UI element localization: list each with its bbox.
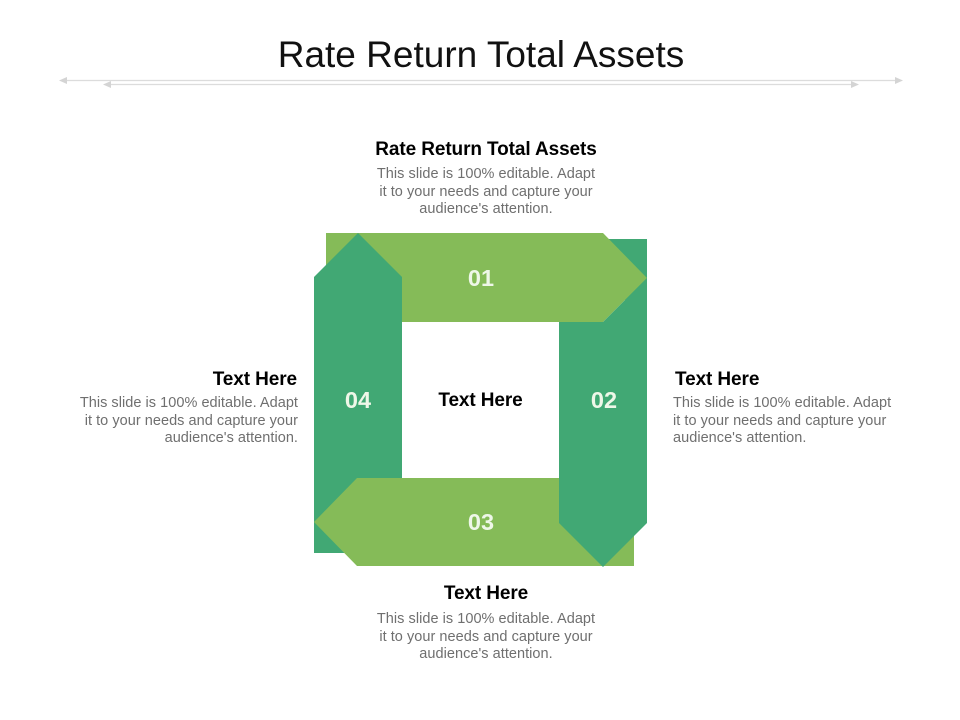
- top text: it to your needs and capture your: [379, 184, 593, 200]
- left text: audience's attention.: [165, 430, 298, 446]
- bottom heading: Text Here: [444, 583, 528, 604]
- right text: it to your needs and capture your: [673, 413, 886, 429]
- arrow 03: [314, 478, 634, 566]
- decorative double-headed title rule: [59, 77, 903, 88]
- title: Rate Return Total Assets: [278, 34, 684, 75]
- bottom text: [377, 611, 595, 662]
- bottom text: This slide is 100% editable. Adapt: [377, 611, 595, 627]
- right heading: Text Here: [675, 369, 759, 390]
- top text: [377, 166, 595, 217]
- arrow 01: [326, 233, 647, 322]
- arrow 02 body: [559, 278, 647, 567]
- arrow 04: [314, 233, 402, 553]
- top text: audience's attention.: [419, 201, 553, 217]
- top heading: Rate Return Total Assets: [375, 139, 597, 160]
- number 02: 02: [591, 387, 617, 413]
- left text: it to your needs and capture your: [85, 413, 298, 429]
- left text: [80, 395, 298, 446]
- top text: This slide is 100% editable. Adapt: [377, 166, 595, 182]
- bottom text: it to your needs and capture your: [379, 629, 593, 645]
- number 03: 03: [468, 509, 494, 535]
- right text: This slide is 100% editable. Adapt: [673, 395, 891, 411]
- number 01: 01: [468, 265, 494, 291]
- center box: [402, 322, 559, 478]
- bottom text: audience's attention.: [419, 646, 553, 662]
- right text: audience's attention.: [673, 430, 806, 446]
- right text: [673, 395, 892, 446]
- number 04: 04: [345, 387, 371, 413]
- left text: This slide is 100% editable. Adapt: [80, 395, 298, 411]
- center label: Text Here: [438, 390, 523, 411]
- left heading: Text Here: [213, 369, 297, 390]
- arrow 02 top corner: [600, 239, 647, 300]
